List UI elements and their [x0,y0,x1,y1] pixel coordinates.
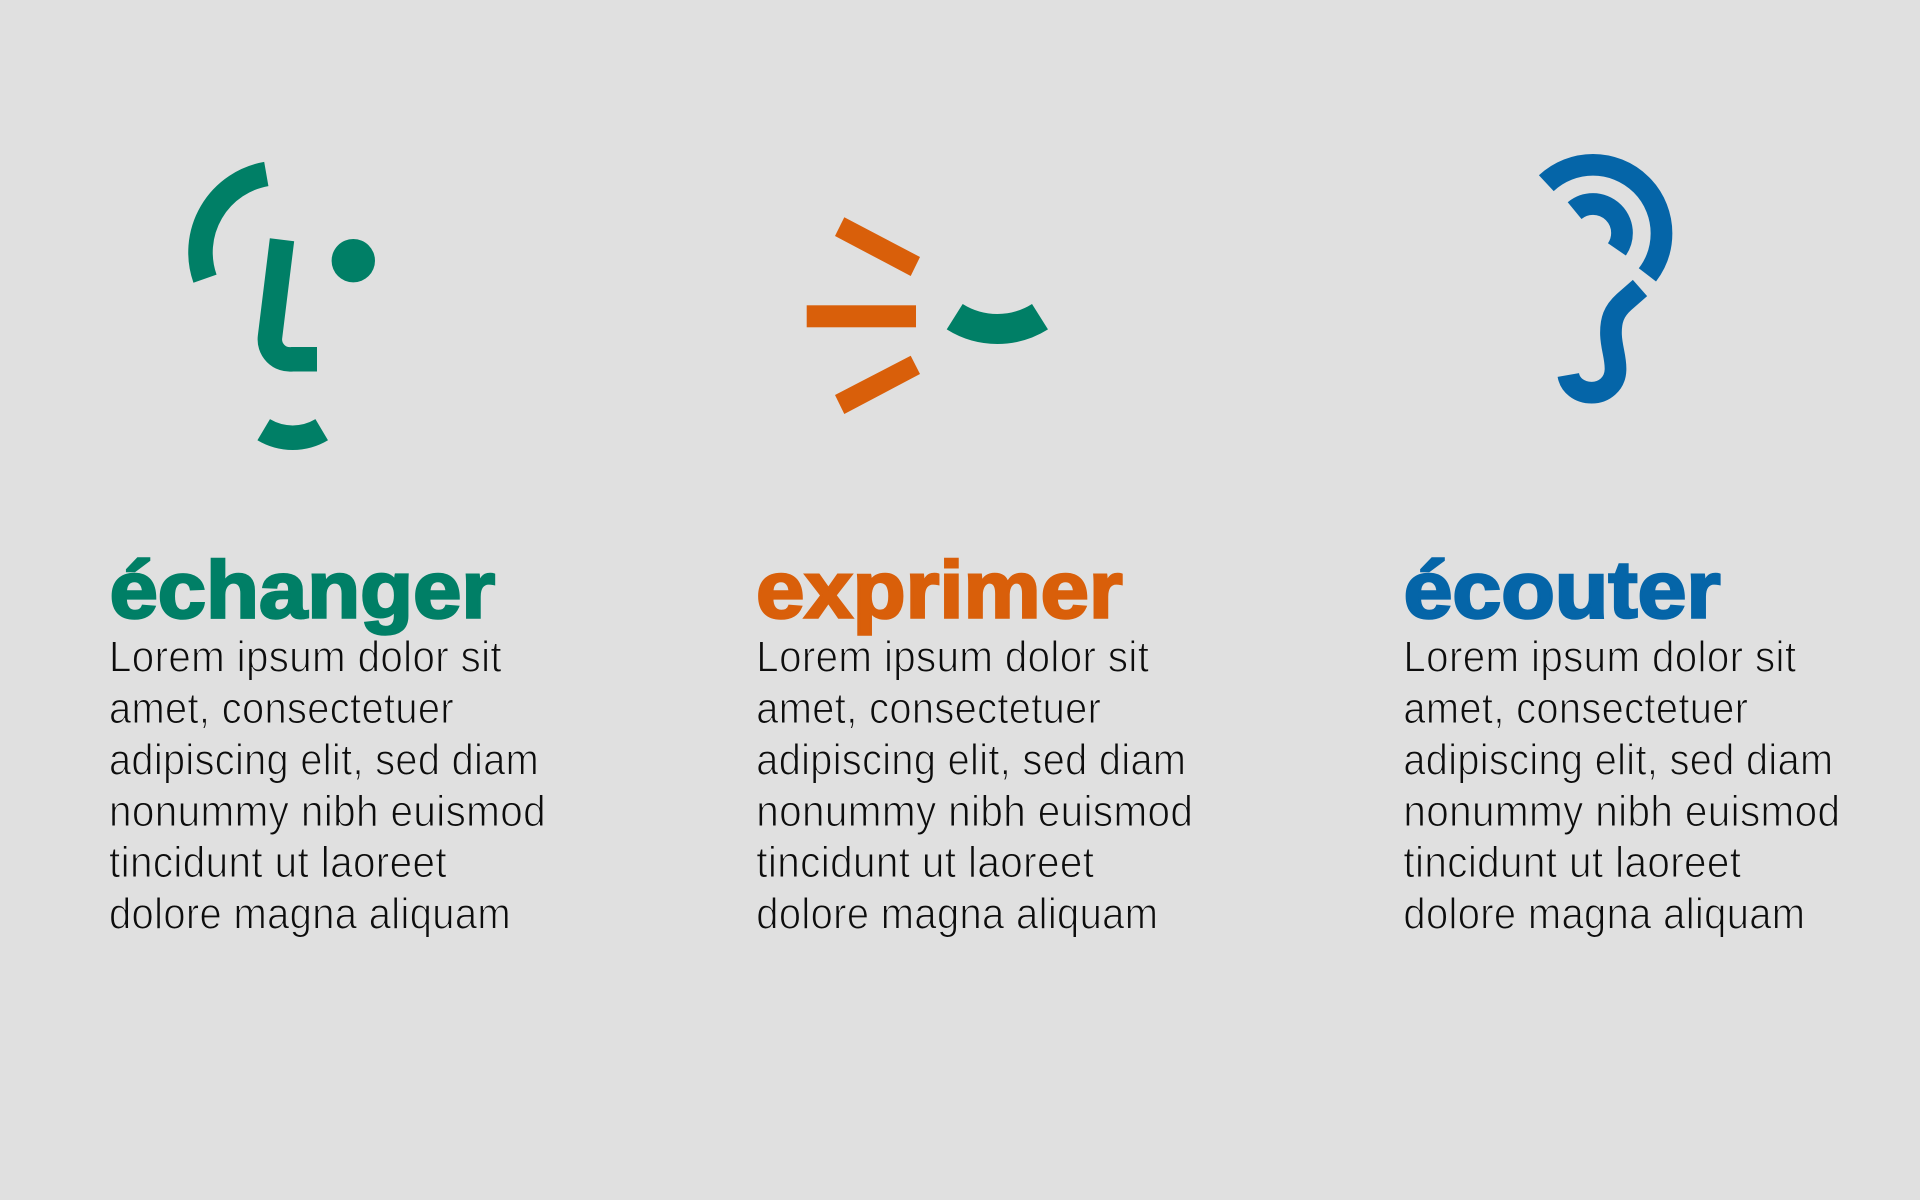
ear inner arc [1575,204,1622,249]
speech ray middle [807,305,916,327]
text block: échanger: tincidunt ut laoreet [109,838,447,887]
text block: échanger [109,633,546,938]
text block: exprimer: Lorem ipsum dolor sit [756,633,1149,682]
panel: exprimer [756,217,1193,938]
icon: mouth with speech rays [807,217,1040,414]
text block: exprimer: tincidunt ut laoreet [756,838,1094,887]
icon: face in profile [200,174,375,438]
text block: exprimer: amet, consectetuer [756,684,1101,733]
text block: écouter: amet, consectetuer [1403,684,1748,733]
panel: échanger [109,174,546,938]
text block: échanger: Lorem ipsum dolor sit [109,633,502,682]
heading: exprimer: exprimer [756,545,1123,635]
face contour arc [200,174,266,279]
eye [332,239,375,282]
panel: écouter [1403,165,1840,938]
heading: échanger: échanger [110,545,495,635]
text block: écouter [1403,633,1840,938]
text block: échanger: dolore magna aliquam [109,889,511,938]
speech ray bottom [835,356,920,414]
ear outer arc [1546,165,1662,275]
ear lobe [1568,288,1640,393]
text block: échanger: nonummy nibh euismod [109,787,546,836]
text block: échanger: adipiscing elit, sed diam [109,735,539,784]
text block: exprimer: dolore magna aliquam [756,889,1158,938]
text block: écouter: nonummy nibh euismod [1403,787,1840,836]
mouth [955,317,1040,329]
nose [270,240,317,359]
text block: échanger: amet, consectetuer [109,684,454,733]
text block: écouter: tincidunt ut laoreet [1403,838,1741,887]
text block: exprimer: adipiscing elit, sed diam [756,735,1186,784]
heading: écouter: écouter [1404,545,1721,635]
text block: écouter: Lorem ipsum dolor sit [1403,633,1796,682]
mouth [264,430,322,438]
text block: écouter: dolore magna aliquam [1403,889,1805,938]
speech ray top [835,217,920,276]
text block: exprimer [756,633,1193,938]
text block: écouter: adipiscing elit, sed diam [1403,735,1833,784]
text block: exprimer: nonummy nibh euismod [756,787,1193,836]
icon: ear [1546,165,1662,393]
